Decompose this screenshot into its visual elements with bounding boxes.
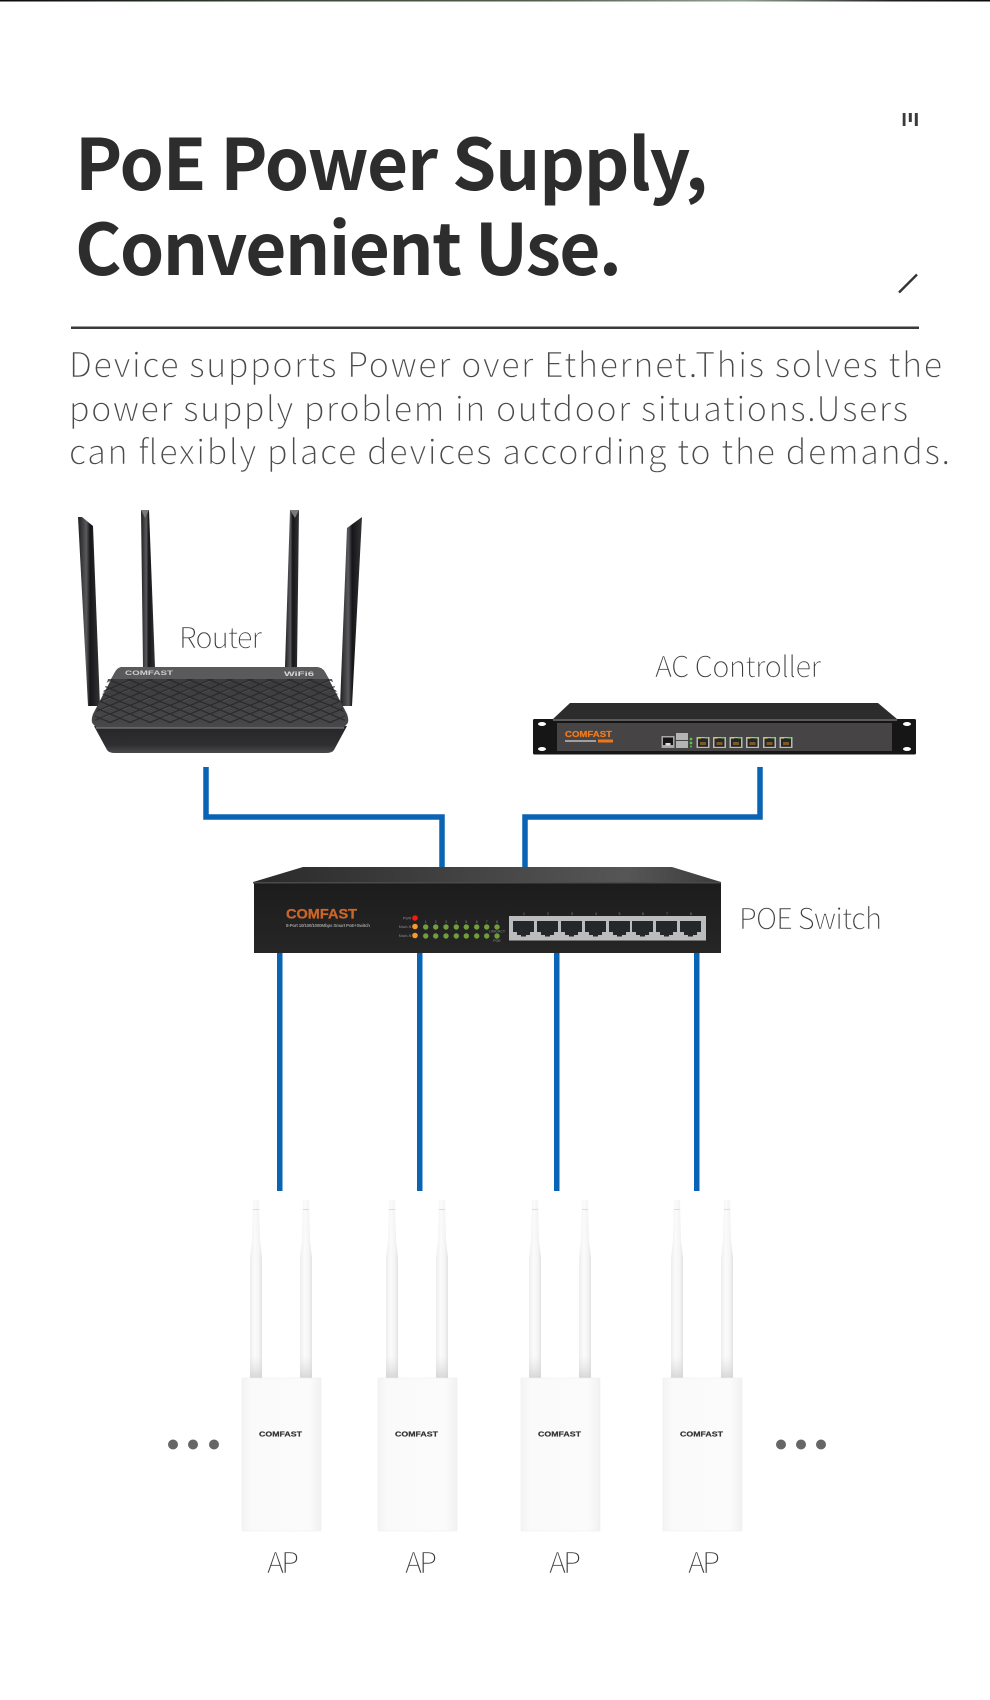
- AP labels: AP: [688, 1540, 720, 1582]
- LED labels: LINK/ACT: [489, 930, 506, 934]
- chassis front and ears: [533, 719, 916, 754]
- POE switch device: 8-Port 10/100/1000Mbps Smart PoE+Switch: [286, 923, 370, 928]
- router device: WiFi6: [284, 671, 315, 678]
- router brand marks: COMFAST: [125, 671, 174, 677]
- POE switch device: [253, 867, 721, 953]
- status LEDs: [690, 738, 692, 748]
- port numbers: 3: [571, 912, 573, 916]
- LED labels: 5: [465, 920, 467, 924]
- label: AC controller: AC Controller: [655, 644, 822, 686]
- router weave texture: [95, 679, 345, 723]
- front panel: [557, 723, 892, 751]
- router lip highlight: [96, 727, 344, 729]
- AP labels: AP: [405, 1540, 437, 1582]
- LED labels: Mach-N: [399, 925, 412, 929]
- LED labels: POE: [493, 939, 501, 943]
- switch top: [253, 867, 721, 882]
- LED labels: Mach-N: [399, 934, 412, 938]
- LED labels: 1: [425, 920, 427, 924]
- AP 1: COMFAST: [259, 1430, 302, 1438]
- port numbers: 1: [523, 912, 525, 916]
- port numbers: 7: [666, 912, 668, 916]
- chassis top: [553, 703, 897, 719]
- AP 4: COMFAST: [680, 1430, 723, 1438]
- ethernet ports: [696, 737, 792, 748]
- connection lines: upper: [206, 767, 760, 868]
- AC controller device: [533, 703, 916, 754]
- AP 2: COMFAST: [395, 1430, 438, 1438]
- switch front: [254, 882, 721, 953]
- description text: [69, 338, 950, 474]
- port numbers: 4: [595, 912, 597, 916]
- label: POE switch: POE Switch: [739, 896, 882, 938]
- LED labels: 3: [445, 920, 447, 924]
- AP labels: AP: [549, 1540, 581, 1582]
- corner mark: slash: [899, 274, 917, 292]
- antennas: [78, 510, 362, 706]
- router top band: [111, 667, 329, 679]
- LED labels: 2: [435, 920, 437, 924]
- title: [75, 109, 708, 296]
- port numbers: 6: [642, 912, 644, 916]
- heading rule: [71, 326, 919, 329]
- port numbers: [523, 912, 692, 916]
- USB ports: [676, 733, 688, 748]
- AC brand: COMFAST: [565, 729, 613, 739]
- port numbers: 5: [618, 912, 620, 916]
- status LEDs: [412, 915, 500, 939]
- LED labels: PWR: [403, 916, 412, 920]
- ellipsis left: [168, 1440, 219, 1450]
- description text: Device supports Power over Ethernet.This solves the: [69, 338, 942, 387]
- router device: [78, 510, 362, 753]
- switch ports: [513, 921, 701, 936]
- AP labels: AP: [267, 1540, 299, 1582]
- title: PoE Power Supply,: [75, 109, 708, 211]
- connection lines: lower: [277, 950, 700, 1191]
- console port: [662, 736, 674, 748]
- LED labels: 8: [496, 920, 498, 924]
- AP 1: [242, 1200, 321, 1531]
- title: Convenient Use.: [75, 194, 622, 296]
- antenna caps: [141, 510, 299, 518]
- port numbers: 2: [547, 912, 549, 916]
- AP 4: [663, 1200, 742, 1531]
- AP 2: [378, 1200, 457, 1531]
- ellipsis right: [776, 1440, 826, 1450]
- AP 3: [521, 1200, 600, 1531]
- port numbers: 8: [690, 912, 692, 916]
- router front shell: [94, 726, 347, 753]
- description text: can flexibly place devices according to the demands.: [69, 425, 950, 474]
- LED labels: 4: [455, 920, 457, 924]
- switch brand: COMFAST: [286, 906, 358, 922]
- description text: power supply problem in outdoor situations.Users: [69, 382, 908, 431]
- label: router: Router: [179, 615, 263, 657]
- port panel: [509, 916, 706, 940]
- ear holes: [538, 722, 911, 751]
- router top surface: [92, 667, 348, 728]
- LED labels: 7: [486, 920, 488, 924]
- AP 3: COMFAST: [538, 1430, 581, 1438]
- top edge strip: [0, 0, 990, 2]
- LED labels: [399, 916, 506, 943]
- LED labels: 6: [476, 920, 478, 924]
- AP labels: [267, 1540, 720, 1582]
- corner mark: bars: [903, 113, 918, 126]
